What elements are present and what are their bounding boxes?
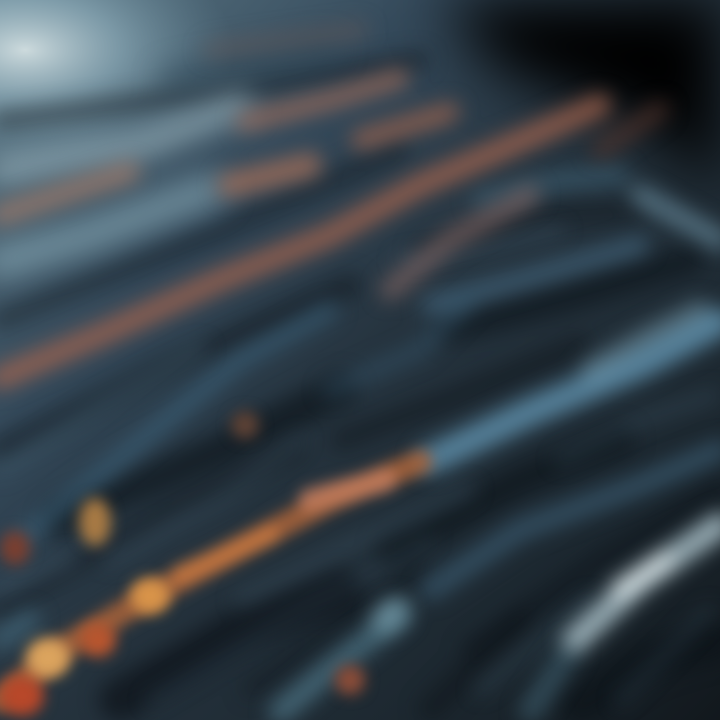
glowing orange dots xyxy=(0,411,365,716)
faint lighter diagonal streak texture xyxy=(0,230,715,700)
orange streaks xyxy=(0,30,660,378)
bright orange lower streak xyxy=(0,462,420,700)
top-right dark corner xyxy=(440,0,720,190)
light streak lower right xyxy=(385,525,720,640)
top-left light glow xyxy=(0,0,235,165)
pale blue streaks, upper left xyxy=(0,50,330,262)
blue streaks xyxy=(0,175,720,712)
